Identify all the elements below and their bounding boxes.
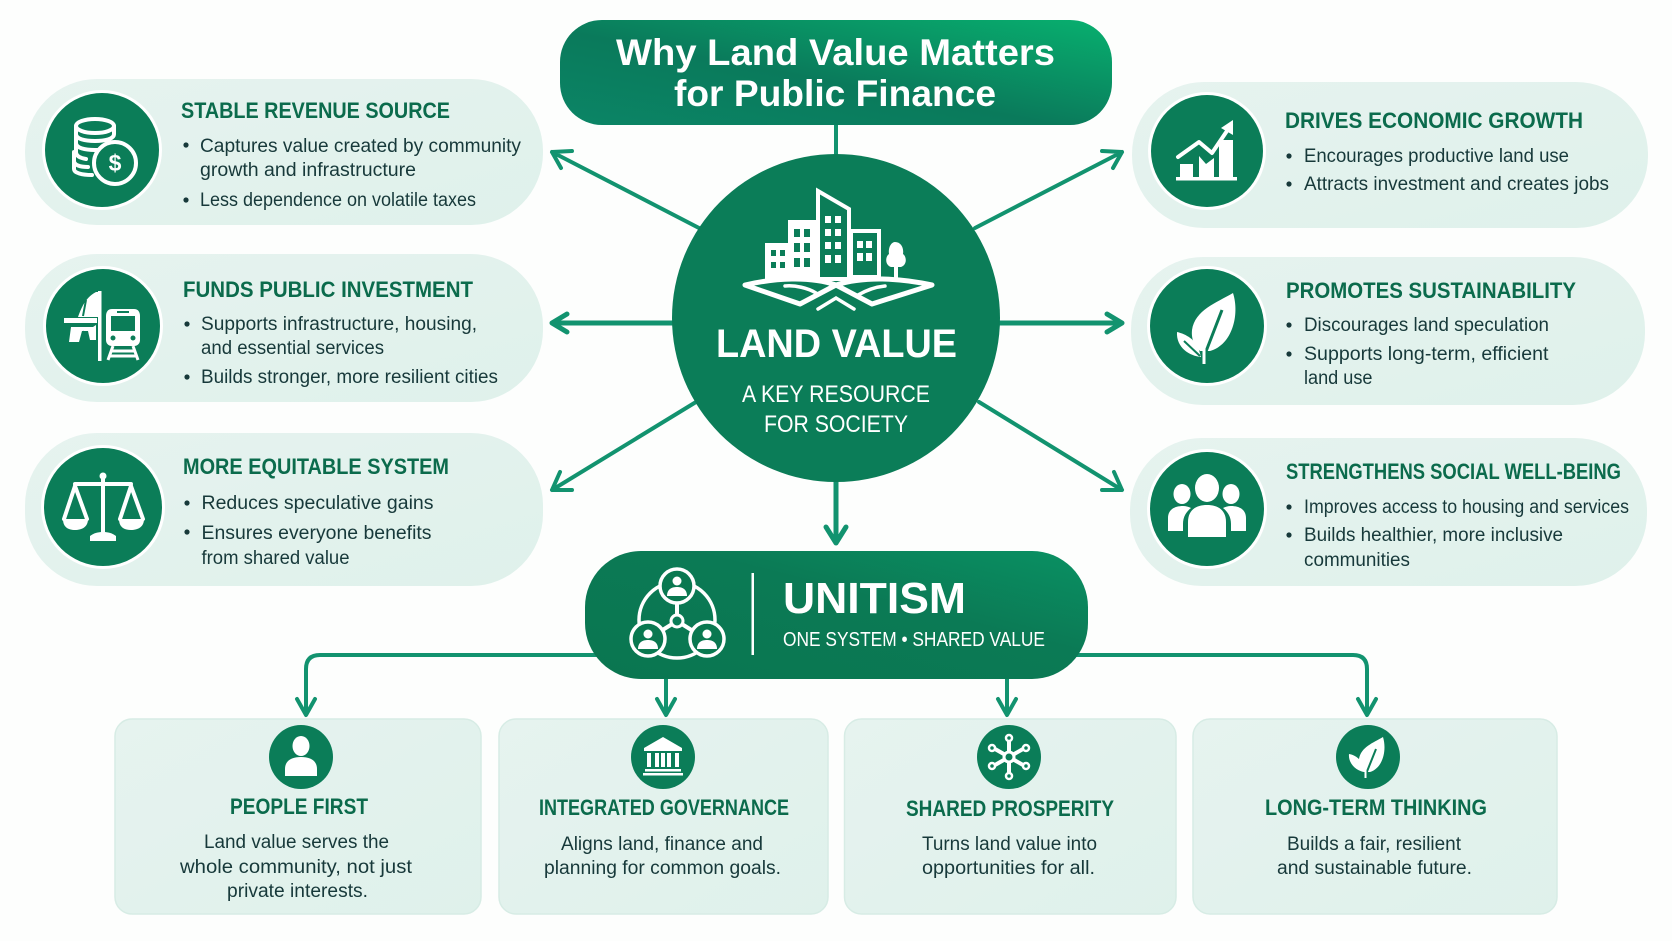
panel: drives economic growth [1132, 82, 1648, 228]
text block: and sustainable future. [1277, 858, 1472, 879]
panel: stable revenue source [25, 79, 543, 225]
icon: scales [63, 472, 144, 541]
unitism banner [585, 551, 1088, 679]
text block [1286, 146, 1609, 195]
text block: from shared value [202, 548, 350, 569]
text block [183, 136, 521, 211]
card: shared prosperity: SHARED PROSPERITY [906, 796, 1114, 821]
text block: Captures value created by community [200, 136, 521, 157]
text block: Discourages land speculation [1304, 315, 1549, 336]
text block: Supports long-term, efficient [1304, 344, 1549, 365]
text block: opportunities for all. [922, 858, 1095, 879]
card: integrated governance: INTEGRATED GOVERNANCE [539, 795, 789, 820]
text block: Aligns land, finance and [561, 834, 763, 855]
text block: Ensures everyone benefits [202, 523, 432, 544]
text block [1286, 315, 1549, 389]
icon: network [989, 735, 1029, 779]
text block [184, 314, 498, 388]
central circle: land value: LAND VALUE [716, 322, 957, 366]
heading: FUNDS PUBLIC INVESTMENT [183, 277, 474, 302]
central circle: land value [672, 154, 1000, 482]
panel: strengthens social well-being [1130, 438, 1647, 586]
card: shared prosperity [844, 719, 1176, 914]
text block: Builds healthier, more inclusive [1304, 525, 1563, 546]
icon: connected people [631, 569, 724, 658]
text block: whole community, not just [179, 857, 413, 878]
text block [179, 832, 413, 902]
icon: coins: $ [109, 150, 122, 176]
heading: PROMOTES SUSTAINABILITY [1286, 278, 1576, 303]
icon: city on land [745, 191, 932, 309]
text block: private interests. [227, 881, 368, 902]
text block: Less dependence on volatile taxes [200, 190, 476, 211]
central circle: land value: A KEY RESOURCE [742, 381, 930, 408]
icon: people [1168, 474, 1246, 537]
connector arrows to principle cards [297, 655, 1376, 715]
text block: communities [1304, 550, 1410, 571]
panel: promotes sustainability [1131, 257, 1645, 405]
text block: Turns land value into [922, 834, 1097, 855]
panel: more equitable system [25, 433, 543, 586]
icon: coins [74, 119, 136, 184]
text block: and essential services [201, 338, 384, 359]
text block: Reduces speculative gains [202, 493, 434, 514]
unitism banner: ONE SYSTEM • SHARED VALUE [783, 629, 1045, 651]
icon: leaf [1177, 293, 1235, 364]
arrows from centre to panels [552, 125, 1122, 543]
text block: Supports infrastructure, housing, [201, 314, 477, 335]
icon: growth chart [1176, 120, 1237, 180]
text block [922, 834, 1097, 879]
text block [184, 493, 434, 569]
text block: Improves access to housing and services [1304, 497, 1629, 518]
card: long-term thinking: LONG-TERM THINKING [1265, 795, 1487, 820]
heading: STABLE REVENUE SOURCE [181, 98, 450, 123]
text block: Attracts investment and creates jobs [1304, 174, 1609, 195]
text block: Land value serves the [204, 832, 389, 853]
title banner: Why Land Value Matters [616, 31, 1055, 73]
text block: land use [1304, 368, 1372, 389]
text block: planning for common goals. [544, 858, 781, 879]
icon: small leaf [1349, 737, 1384, 778]
card: long-term thinking [1193, 719, 1557, 914]
unitism banner: UNITISM [783, 574, 966, 623]
text block: Builds a fair, resilient [1287, 834, 1462, 855]
title banner: for Public Finance [674, 72, 996, 114]
text block: Encourages productive land use [1304, 146, 1569, 167]
card: integrated governance [499, 719, 828, 914]
icon: person [285, 736, 317, 776]
title banner [560, 20, 1112, 125]
icon: institution [643, 737, 683, 776]
text block: Builds stronger, more resilient cities [201, 367, 498, 388]
text block: growth and infrastructure [200, 160, 416, 181]
heading: MORE EQUITABLE SYSTEM [183, 454, 449, 479]
card: people first: PEOPLE FIRST [230, 794, 368, 819]
heading: DRIVES ECONOMIC GROWTH [1285, 108, 1583, 133]
card: people first [115, 719, 481, 914]
text block [1277, 834, 1472, 879]
icon: road and train [64, 291, 140, 361]
text block [544, 834, 781, 879]
central circle: land value: FOR SOCIETY [764, 411, 908, 438]
panel: funds public investment [25, 254, 543, 402]
text block [1286, 497, 1629, 571]
